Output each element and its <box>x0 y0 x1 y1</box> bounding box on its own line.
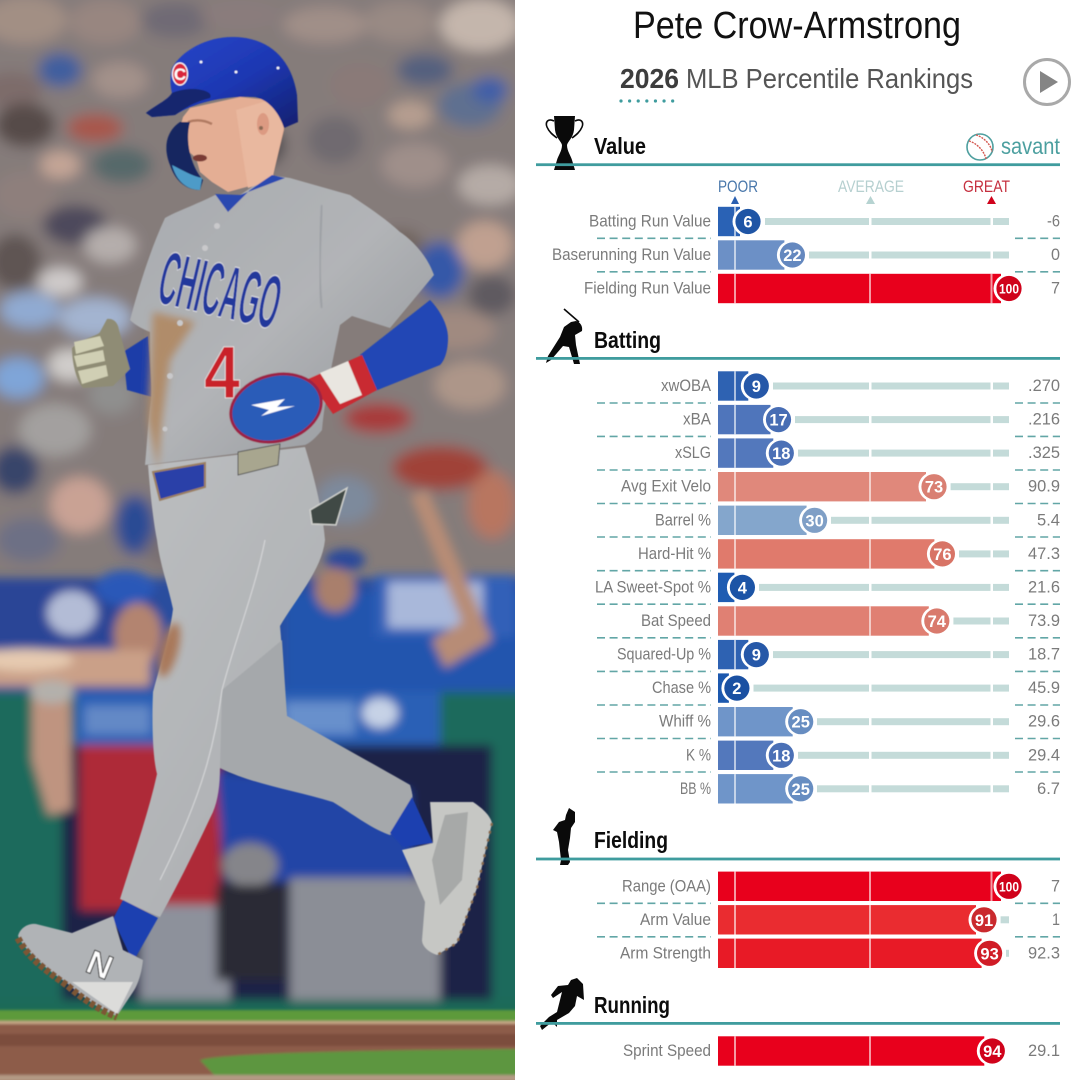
icon: savant baseball <box>967 134 993 160</box>
row: Hard-Hit % <box>638 539 1060 569</box>
row: Squared-Up %: 9 <box>752 647 761 665</box>
section: Value <box>536 116 1061 170</box>
row: BB % <box>680 774 1060 804</box>
front cleat <box>18 916 143 1017</box>
sliding glove in pocket <box>310 488 347 525</box>
pants seam <box>160 540 265 880</box>
subtitle dotted accent <box>621 99 680 103</box>
row: Hard-Hit %: 47.3 <box>1028 544 1060 563</box>
row: Barrel %: 30 <box>805 512 824 530</box>
helmet: C <box>174 65 186 84</box>
subtitle: MLB Percentile Rankings <box>686 63 973 94</box>
row: Hard-Hit %: 76 <box>933 546 952 564</box>
row: Range (OAA): 100 <box>999 878 1019 894</box>
row: Avg Exit Velo: Avg Exit Velo <box>621 477 711 496</box>
section rule <box>536 163 1060 166</box>
row: xSLG <box>675 438 1060 468</box>
savant wordmark: savant <box>1001 133 1061 159</box>
row: Fielding Run Value <box>584 274 1060 303</box>
row: Avg Exit Velo <box>621 472 1060 501</box>
stats panel <box>536 5 1070 1066</box>
row: Batting Run Value <box>589 207 1060 236</box>
batting glove <box>72 319 130 388</box>
row: Bat Speed <box>641 606 1060 636</box>
heading: Batting <box>594 327 661 353</box>
row: Baserunning Run Value <box>552 240 1060 270</box>
right forearm sleeve <box>360 300 448 391</box>
front cleat: N <box>81 943 118 988</box>
row: Bat Speed: 73.9 <box>1028 611 1060 630</box>
row: Arm Value: 1 <box>1052 910 1060 929</box>
wrist band <box>308 355 377 414</box>
row: LA Sweet-Spot % <box>595 573 1060 602</box>
row: Barrel %: Barrel % <box>655 510 711 529</box>
jersey number: 4 <box>204 331 240 414</box>
row: Batting Run Value: Batting Run Value <box>589 212 711 230</box>
socks <box>113 797 433 962</box>
row: BB %: 25 <box>792 781 810 799</box>
row: Squared-Up % <box>617 640 1060 669</box>
row: K %: 18 <box>772 747 790 765</box>
row: Baserunning Run Value: 0 <box>1051 245 1060 264</box>
scale legend: POOR <box>718 178 758 196</box>
section: Fielding <box>536 808 1060 865</box>
row: LA Sweet-Spot %: 21.6 <box>1028 577 1060 596</box>
row: Whiff %: 25 <box>792 714 810 732</box>
row: Sprint Speed: 94 <box>983 1043 1002 1061</box>
row: xBA: .216 <box>1028 410 1060 429</box>
row: xBA <box>683 405 1060 434</box>
heading: Running <box>594 992 670 1018</box>
row: Whiff %: 29.6 <box>1028 712 1060 731</box>
row: Batting Run Value: -6 <box>1047 212 1060 230</box>
row: xwOBA: xwOBA <box>661 376 712 395</box>
row: Arm Value <box>640 905 1060 934</box>
row: Barrel %: 5.4 <box>1037 510 1060 529</box>
scale legend: GREAT <box>963 178 1010 196</box>
row: Chase % <box>652 673 1060 703</box>
row: Squared-Up %: 18.7 <box>1028 645 1060 664</box>
section rule <box>536 357 1060 360</box>
photo: Pete Crow-Armstrong running in Cubs road uniform <box>0 0 540 1080</box>
row: xwOBA <box>661 371 1060 401</box>
row: Bat Speed: Bat Speed <box>641 611 711 630</box>
facial features <box>188 113 269 162</box>
helmet <box>146 37 298 128</box>
player figure: CHICAGO <box>151 236 289 346</box>
row: K %: K % <box>686 745 711 764</box>
row: Arm Strength: 93 <box>980 945 999 963</box>
row: Arm Value: Arm Value <box>640 910 711 929</box>
row: K % <box>686 741 1060 770</box>
blurred crowd background <box>0 0 540 590</box>
section rule <box>536 1022 1060 1025</box>
row: xSLG: .325 <box>1028 443 1060 462</box>
row: Baserunning Run Value: 22 <box>783 247 802 265</box>
jersey buttons <box>162 223 220 432</box>
row: Avg Exit Velo: 73 <box>925 479 943 497</box>
row: Whiff % <box>659 707 1060 736</box>
row: Fielding Run Value: 100 <box>999 280 1019 296</box>
row: xwOBA: .270 <box>1028 376 1060 395</box>
row: Sprint Speed: Sprint Speed <box>623 1041 711 1060</box>
back leg shading <box>220 640 346 796</box>
row: xBA: 17 <box>769 412 788 430</box>
row: BB %: BB % <box>680 779 711 798</box>
row: Barrel % <box>655 506 1060 535</box>
blurred dugout, wall and spectators <box>0 490 540 1022</box>
belt <box>153 444 280 500</box>
row: Batting Run Value: 6 <box>743 214 753 232</box>
row: Range (OAA): 7 <box>1051 876 1060 895</box>
heading: Value <box>594 133 646 159</box>
infield grass and dirt <box>0 1010 520 1080</box>
row: K %: 29.4 <box>1028 745 1060 764</box>
title: Pete Crow-Armstrong <box>633 5 961 47</box>
icon: trophy <box>546 116 583 170</box>
row: Squared-Up %: Squared-Up % <box>617 645 711 664</box>
pants <box>120 447 413 917</box>
row: Range (OAA) <box>622 872 1060 901</box>
section: Batting <box>536 309 1060 364</box>
row: xwOBA: 9 <box>752 378 761 396</box>
row: BB %: 6.7 <box>1037 779 1060 798</box>
icon: batter silhouette <box>546 309 582 364</box>
neck and face <box>180 97 284 192</box>
row: Chase %: Chase % <box>652 678 711 697</box>
row: LA Sweet-Spot %: LA Sweet-Spot % <box>595 577 711 596</box>
section: Running <box>536 978 1060 1030</box>
subtitle: 2026 <box>620 63 679 94</box>
icon: runner silhouette <box>540 978 584 1030</box>
row: Sprint Speed: 29.1 <box>1028 1041 1060 1060</box>
row: Whiff %: Whiff % <box>659 712 711 731</box>
elbow guard with lightning bolt <box>228 372 324 444</box>
sleeve, left arm <box>123 336 152 397</box>
row: Hard-Hit %: Hard-Hit % <box>638 544 711 563</box>
row: Arm Strength: 92.3 <box>1028 943 1060 962</box>
collar <box>215 175 285 212</box>
icon: fielder silhouette <box>553 808 575 865</box>
jersey <box>130 175 434 465</box>
dirt stain on pants <box>153 621 185 679</box>
row: Arm Value: 91 <box>975 912 993 930</box>
scale legend <box>718 178 1010 204</box>
row: Chase %: 2 <box>732 680 741 698</box>
row: Avg Exit Velo: 90.9 <box>1028 477 1060 496</box>
row: Bat Speed: 74 <box>928 613 947 631</box>
section rule <box>536 858 1060 860</box>
row: Fielding Run Value: Fielding Run Value <box>584 278 711 298</box>
row: xSLG: 18 <box>772 445 790 463</box>
row: Range (OAA): Range (OAA) <box>622 876 711 895</box>
sleeve seam <box>320 205 322 308</box>
earflap guard <box>166 122 203 190</box>
row: xBA: xBA <box>683 410 712 429</box>
back cleat <box>402 802 492 955</box>
row: Chase %: 45.9 <box>1028 678 1060 697</box>
row: Sprint Speed <box>623 1036 1060 1066</box>
icon: play button <box>1024 60 1070 104</box>
heading: Fielding <box>594 827 668 853</box>
row: xSLG: xSLG <box>675 443 711 462</box>
player figure <box>18 37 492 1017</box>
row: Arm Strength <box>620 939 1060 968</box>
row: Arm Strength: Arm Strength <box>620 943 711 962</box>
scale legend: AVERAGE <box>838 178 904 196</box>
row: Fielding Run Value: 7 <box>1051 278 1060 298</box>
dirt stain on jersey <box>148 312 195 470</box>
row: Baserunning Run Value: Baserunning Run Value <box>552 245 711 264</box>
row: LA Sweet-Spot %: 4 <box>738 579 748 597</box>
